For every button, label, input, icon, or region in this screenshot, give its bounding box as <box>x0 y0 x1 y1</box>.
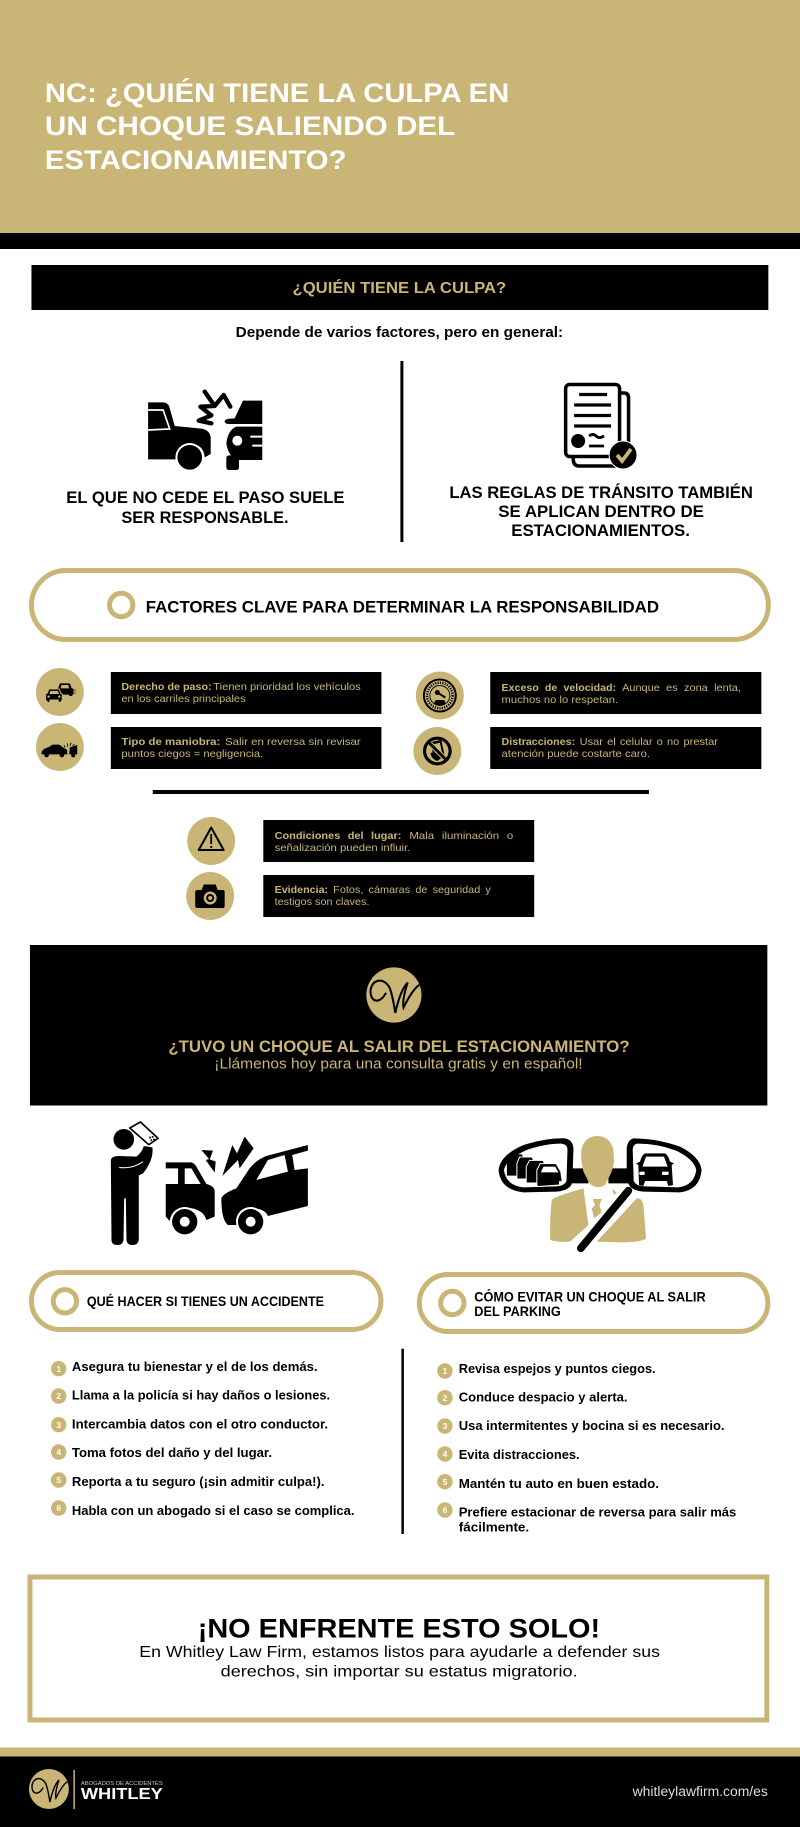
icon: car crash <box>148 392 262 472</box>
factor: distractions: Usar el celular o no prestar <box>580 737 719 748</box>
section heading bar <box>31 265 768 310</box>
icon: legal document <box>566 384 637 469</box>
icon: no phone <box>425 738 450 764</box>
footer logo: ABOGADOS DE ACCIDENTES <box>81 1781 163 1787</box>
factor: right of way <box>36 668 381 716</box>
factor: maneuver type: puntos ciegos = negligencia. <box>121 749 263 760</box>
factor: speeding <box>416 672 761 720</box>
factor: location conditions: Condiciones del lugar: <box>275 831 401 842</box>
factor: maneuver type: Tipo de maniobra: <box>121 737 220 748</box>
divider: factors <box>153 790 649 794</box>
list: how to avoid a crash: Mantén tu auto en buen estado. <box>459 1476 659 1491</box>
factor: evidence: testigos son claves. <box>275 897 369 908</box>
factor: right of way: en los carriles principales <box>121 694 246 705</box>
list: what to do after an accident: Asegura tu bienestar y el de los demás. <box>72 1359 318 1374</box>
list: how to avoid a crash: 2 <box>443 1393 448 1403</box>
list: what to do after an accident: 4 <box>56 1447 61 1457</box>
list: how to avoid a crash: 3 <box>443 1421 448 1431</box>
closing text: En Whitley Law Firm, estamos listos para ayudarle a defender sus <box>139 1644 660 1661</box>
pill heading: how to avoid: CÓMO EVITAR UN CHOQUE AL SALIR <box>474 1290 706 1305</box>
factor: evidence <box>186 872 534 920</box>
factor: distractions: atención puede costarte caro. <box>502 749 650 760</box>
list: what to do after an accident: 6 <box>56 1503 61 1513</box>
factor: right of way: Tienen prioridad los vehículos <box>213 682 361 693</box>
icon: rear-end collision <box>42 743 77 757</box>
icon: warning triangle <box>199 828 224 850</box>
footer logo: WHITLEY <box>81 1786 163 1803</box>
closing text: derechos, sin importar su estatus migratorio. <box>221 1664 578 1681</box>
factor: maneuver type: Salir en reversa sin revisar <box>225 737 362 748</box>
list: what to do after an accident: 3 <box>56 1420 61 1430</box>
list: how to avoid a crash: Usa intermitentes y bocina si es necesario. <box>459 1418 725 1433</box>
divider: lists <box>401 1349 404 1534</box>
title <box>45 77 509 175</box>
list: what to do after an accident: 5 <box>56 1475 61 1485</box>
pill heading: how to avoid: DEL PARKING <box>474 1304 561 1319</box>
text: failure to yield <box>66 489 344 527</box>
factor: location conditions <box>187 817 534 865</box>
factor: maneuver type <box>36 723 381 771</box>
intro text: Depende de varios factores, pero en general: <box>236 324 563 341</box>
footer logo <box>29 1769 163 1809</box>
text: failure to yield: EL QUE NO CEDE EL PASO SUELE <box>66 489 344 507</box>
logo mark <box>366 967 421 1023</box>
list: what to do after an accident: 2 <box>56 1391 61 1401</box>
closing heading: ¡NO ENFRENTE ESTO SOLO! <box>198 1614 600 1644</box>
factor: speeding: Aunque es zona lenta, <box>622 683 741 694</box>
header banner <box>0 0 800 249</box>
list: how to avoid a crash: Prefiere estacionar de reversa para salir más <box>459 1505 736 1520</box>
factor: evidence: Fotos, cámaras de seguridad y <box>333 885 491 896</box>
text: traffic rules: ESTACIONAMIENTOS. <box>511 522 690 540</box>
closing text <box>139 1644 660 1681</box>
list: how to avoid a crash: Evita distracciones. <box>459 1447 580 1462</box>
list: how to avoid a crash: 4 <box>443 1449 448 1459</box>
list: what to do after an accident: Reporta a tu seguro (¡sin admitir culpa!). <box>72 1474 325 1489</box>
list: what to do after an accident: 1 <box>56 1364 61 1374</box>
icon: driver with mirrors and seat belt <box>499 1136 702 1248</box>
text: traffic rules: LAS REGLAS DE TRÁNSITO TAMBIÉN <box>449 483 753 502</box>
cta subtext: ¡Llámenos hoy para una consulta gratis y en español! <box>214 1056 583 1073</box>
factor: distractions: Distracciones: <box>502 737 575 748</box>
section heading bar: ¿QUIÉN TIENE LA CULPA? <box>293 278 506 297</box>
cta heading: ¿TUVO UN CHOQUE AL SALIR DEL ESTACIONAMIENTO? <box>168 1037 630 1056</box>
text: failure to yield: SER RESPONSABLE. <box>121 509 289 527</box>
title: ESTACIONAMIENTO? <box>45 145 346 175</box>
list: how to avoid a crash: fácilmente. <box>459 1519 529 1534</box>
list: what to do after an accident: Habla con un abogado si el caso se complica. <box>72 1503 354 1518</box>
call to action panel <box>30 945 767 1106</box>
icon: two cars <box>46 683 76 702</box>
list: what to do after an accident: Toma fotos del daño y del lugar. <box>72 1445 272 1460</box>
factor: evidence: Evidencia: <box>275 885 328 896</box>
factor: location conditions: Mala iluminación o <box>409 831 514 842</box>
divider <box>400 361 403 542</box>
factor: location conditions: señalización pueden influir. <box>275 843 410 854</box>
list: how to avoid a crash: 1 <box>443 1366 448 1376</box>
list: how to avoid a crash: Revisa espejos y puntos ciegos. <box>459 1361 656 1376</box>
factor: distractions <box>413 727 761 775</box>
pill heading: key factors <box>31 570 768 640</box>
footer <box>0 1748 800 1827</box>
footer url: whitleylawfirm.com/es <box>632 1783 768 1799</box>
list: what to do after an accident <box>51 1359 354 1518</box>
text: traffic rules: SE APLICAN DENTRO DE <box>498 503 704 521</box>
factor: right of way: Derecho de paso: <box>121 682 212 693</box>
icon: camera <box>195 884 225 908</box>
icon: speedometer <box>423 678 457 712</box>
list: how to avoid a crash <box>437 1361 736 1534</box>
closing panel <box>30 1577 767 1720</box>
text: traffic rules <box>449 483 753 540</box>
list: what to do after an accident: Intercambia datos con el otro conductor. <box>72 1417 328 1432</box>
list: how to avoid a crash: 5 <box>443 1477 448 1487</box>
title: NC: ¿QUIÉN TIENE LA CULPA EN <box>45 77 509 108</box>
list: how to avoid a crash: 6 <box>443 1505 448 1515</box>
pill heading: how to avoid <box>419 1274 768 1332</box>
pill heading: what to do <box>31 1272 381 1330</box>
title: UN CHOQUE SALIENDO DEL <box>45 111 455 141</box>
factor: speeding: muchos no lo respetan. <box>502 695 618 706</box>
pill heading: what to do: QUÉ HACER SI TIENES UN ACCIDENTE <box>87 1294 324 1309</box>
pill heading: key factors: FACTORES CLAVE PARA DETERMINAR LA RESPONSABILIDAD <box>146 598 659 617</box>
icon: person photographing crash <box>111 1122 308 1245</box>
list: what to do after an accident: Llama a la policía si hay daños o lesiones. <box>72 1388 330 1403</box>
list: how to avoid a crash: Conduce despacio y alerta. <box>459 1390 628 1405</box>
factor: speeding: Exceso de velocidad: <box>502 683 616 694</box>
